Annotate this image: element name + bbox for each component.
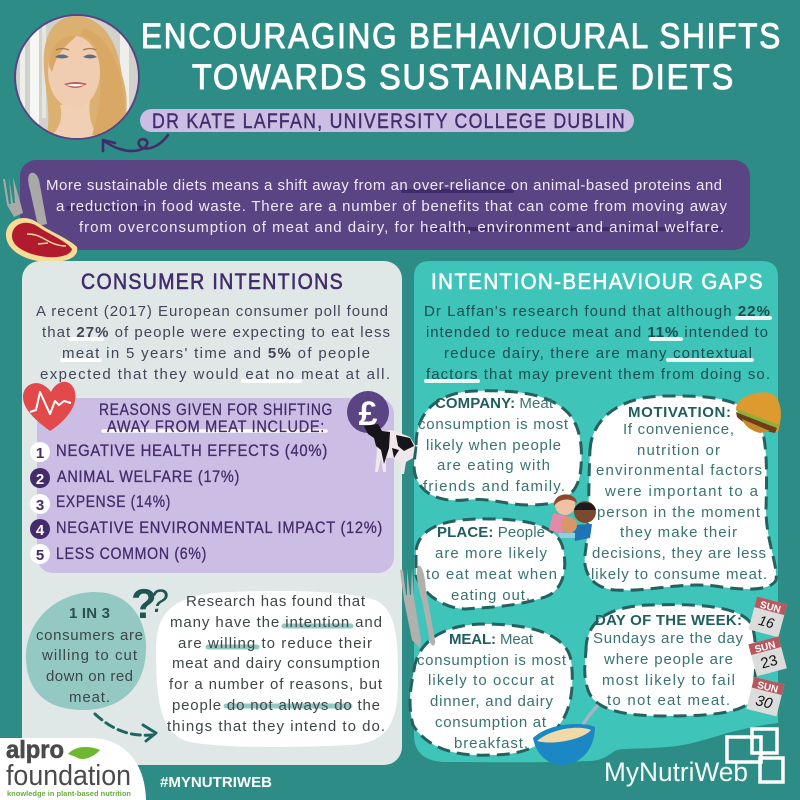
card: motivation: person in the moment — [597, 504, 761, 521]
portrait of Dr Kate Laffan — [14, 14, 140, 140]
panel: intro banner — [20, 160, 750, 250]
panel: consumer intentions — [22, 261, 402, 765]
icon: question marks — [131, 580, 168, 627]
icon: calendar 23: SUN — [754, 640, 777, 656]
card: day of the week: most likely to fail — [602, 672, 735, 689]
research text blob: things that they intend to do. — [167, 718, 385, 735]
heading: reasons: REASONS GIVEN FOR SHIFTING — [99, 401, 333, 419]
icon: heart with pulse — [23, 382, 75, 431]
card: place: are more likely — [435, 545, 548, 562]
callout: 1 in 3 consumers: willing to cut — [41, 647, 138, 664]
logo: alpro foundation: alpro — [6, 736, 64, 764]
reason 5: 5 — [36, 547, 44, 564]
panel: reasons for shifting — [30, 398, 394, 573]
icon: family — [549, 494, 596, 541]
card: place: to eat meat when — [426, 566, 557, 583]
logo: MyNutriWeb — [604, 729, 783, 787]
card: place — [416, 519, 565, 609]
card: day of the week: Sundays are the day — [593, 630, 744, 647]
icon: calendar 23 — [748, 636, 787, 676]
author name pill: DR KATE LAFFAN, UNIVERSITY COLLEGE DUBLIN — [152, 110, 626, 133]
card: day of the week: where people are — [603, 651, 733, 668]
reason 2: ANIMAL WELFARE (17%) — [57, 468, 240, 486]
icon: porridge bowl — [533, 705, 598, 765]
research findings text: reduce dairy, there are many contextual — [444, 345, 752, 362]
consumer poll text: expected that they would eat no meat at all. — [40, 366, 390, 383]
card: meal: MEAL: Meat — [449, 631, 534, 648]
callout: 1 in 3 consumers: consumers are — [36, 627, 143, 644]
card: motivation: If convenience, — [623, 421, 734, 438]
arrow: pill to portrait — [103, 135, 168, 151]
card: day of the week — [585, 605, 756, 716]
icon: calendar 30 — [746, 677, 784, 716]
panel: intro banner: a reduction in food waste. There are a number of benefits that can come from moving away — [56, 198, 728, 215]
card: company: likely when people — [426, 437, 561, 454]
card: company — [414, 391, 581, 505]
research text blob: meat and dairy consumption — [172, 655, 380, 672]
icon: calendar 16: SUN — [759, 600, 782, 616]
card: company: are eating with — [437, 457, 550, 474]
card: company: friends and family. — [423, 478, 565, 495]
callout: 1 in 3 consumers: down on red — [46, 668, 133, 685]
card: meal — [410, 624, 572, 755]
card: meal: consumption at — [435, 714, 547, 731]
card: place: eating out. — [451, 587, 530, 604]
card: place: PLACE: People — [437, 524, 545, 541]
heading: reasons: AWAY FROM MEAT INCLUDE: — [107, 418, 325, 436]
card: motivation: likely to consume meat. — [591, 566, 767, 583]
icon: calendar 16: 16 — [757, 612, 776, 632]
heading: consumer intentions: CONSUMER INTENTIONS — [81, 269, 344, 294]
card: meal: dinner, and dairy — [430, 693, 554, 710]
consumer poll text: that 27% of people were expecting to eat less — [42, 324, 390, 341]
research text blob — [156, 591, 398, 747]
reason 1: NEGATIVE HEALTH EFFECTS (40%) — [56, 442, 328, 460]
card: motivation: environmental factors — [596, 462, 762, 479]
card: company: consumption is most — [418, 416, 569, 433]
card: meal: consumption is most — [417, 652, 567, 669]
icon: question marks: ? — [150, 583, 168, 619]
reason 5 — [30, 544, 207, 564]
hashtag: #MYNUTRIWEB — [160, 774, 272, 791]
card: meal: breakfast. — [454, 735, 528, 752]
arrow: callout to research text — [95, 714, 156, 741]
icon: burger — [736, 392, 781, 433]
icon: pound coin — [347, 391, 389, 433]
reason 4: NEGATIVE ENVIRONMENTAL IMPACT (12%) — [56, 519, 383, 537]
logo: alpro foundation: foundation — [6, 760, 131, 792]
icon: fork and knife — [400, 566, 435, 648]
title: TOWARDS SUSTAINABLE DIETS — [192, 58, 735, 97]
card: motivation: decisions, they are less — [592, 545, 766, 562]
icon: cow — [364, 424, 415, 474]
card: motivation: were important to a — [604, 483, 759, 500]
research findings text — [424, 303, 770, 383]
research text blob: for a number of reasons, but — [169, 676, 383, 693]
panel: intention-behaviour gaps — [414, 261, 778, 762]
icon: calendar 16 — [748, 596, 787, 637]
research text blob: people do not always do the — [172, 697, 380, 714]
card: day of the week: DAY OF THE WEEK: — [595, 612, 742, 629]
research text blob: are willing to reduce their — [178, 635, 372, 652]
reason 5: LESS COMMON (6%) — [56, 545, 207, 563]
panel: intro banner: from overconsumption of meat and dairy, for health, environment and animal welfare. — [79, 219, 724, 236]
card: motivation: nutrition or — [637, 442, 720, 459]
research findings text: intended to reduce meat and 11% intended to — [426, 324, 768, 341]
research findings text: Dr Laffan's research found that although 22% — [424, 303, 770, 320]
card: meal: likely to occur at — [428, 672, 555, 689]
card: motivation: they make their — [620, 524, 737, 541]
callout: 1 in 3 consumers: meat. — [69, 689, 110, 706]
callout: 1 in 3 consumers — [26, 592, 146, 710]
reason 1: 1 — [36, 445, 44, 462]
consumer poll text — [36, 303, 390, 383]
card: company: COMPANY: Meat — [435, 395, 554, 412]
reason 3 — [30, 493, 171, 514]
research findings text: factors that may prevent them from doing so. — [426, 366, 770, 383]
reason 3: 3 — [36, 497, 44, 514]
heading: reasons — [99, 401, 333, 436]
panel: intro banner: More sustainable diets means a shift away from an over-reliance on animal-based proteins and — [46, 177, 722, 194]
reason 3: EXPENSE (14%) — [56, 493, 171, 511]
consumer poll text: meat in 5 years' time and 5% of people — [62, 345, 370, 362]
icon: pound coin: £ — [359, 395, 378, 433]
callout: 1 in 3 consumers: 1 IN 3 — [69, 605, 110, 622]
heading: intention-behaviour gaps: INTENTION-BEHAVIOUR GAPS — [431, 269, 764, 294]
card: day of the week: to not eat meat. — [607, 692, 730, 709]
icon: question marks: ? — [131, 580, 157, 627]
card: motivation: MOTIVATION: — [628, 404, 731, 421]
card: motivation — [585, 396, 776, 590]
reason 2: 2 — [36, 471, 44, 488]
icon: calendar 30: SUN — [756, 680, 779, 696]
title — [141, 17, 782, 97]
research text blob: many have the intention and — [170, 614, 382, 631]
logo: alpro foundation: knowledge in plant-based nutrition — [7, 789, 131, 798]
research text blob: Research has found that — [186, 593, 366, 610]
logo: alpro foundation — [0, 736, 146, 800]
logo: MyNutriWeb: MyNutriWeb — [604, 757, 748, 787]
reason 4: 4 — [36, 522, 45, 539]
consumer poll text: A recent (2017) European consumer poll found — [36, 303, 388, 320]
icon: fork, knife and steak — [3, 173, 77, 262]
icon: calendar 23: 23 — [759, 652, 779, 673]
icon: calendar 30: 30 — [754, 692, 775, 713]
